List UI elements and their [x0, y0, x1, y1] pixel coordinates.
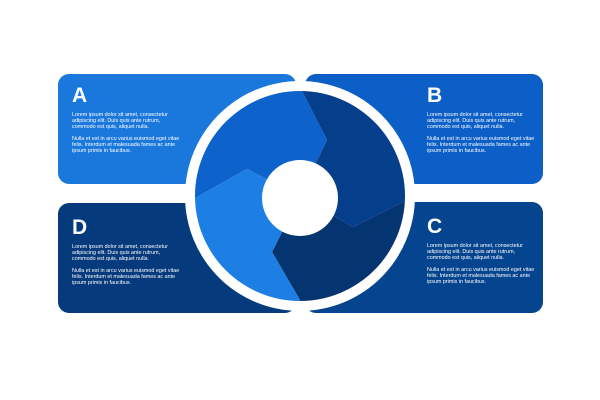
text A: Nulla et est in arcu varius euismod eget vitae felis. Interdum et malesuada fames ac ante ipsum primis in faucibus. [72, 136, 179, 154]
text D: Lorem ipsum dolor sit amet, consectetur adipiscing elit. Duis quis ante rutrum, commodo est quis, aliquet nulla. [72, 244, 168, 262]
circle chart [185, 81, 415, 311]
text A: Lorem ipsum dolor sit amet, consectetur adipiscing elit. Duis quis ante rutrum, commodo est quis, aliquet nulla. [72, 112, 168, 130]
panel D [58, 203, 296, 313]
text B: Lorem ipsum dolor sit amet, consectetur adipiscing elit. Duis quis ante rutrum, commodo est quis, aliquet nulla. [427, 112, 523, 130]
text C: Nulla et est in arcu varius euismod eget vitae felis. Interdum et malesuada fames ac ante ipsum primis in faucibus. [427, 267, 534, 285]
panel B [305, 74, 543, 184]
text D: D [72, 216, 87, 239]
text C: C [427, 215, 442, 238]
text B: B [427, 84, 442, 107]
text D: Nulla et est in arcu varius euismod eget vitae felis. Interdum et malesuada fames ac ante ipsum primis in faucibus. [72, 268, 179, 286]
text B: Nulla et est in arcu varius euismod eget vitae felis. Interdum et malesuada fames ac ante ipsum primis in faucibus. [427, 136, 534, 154]
panel A [58, 74, 296, 184]
text C: Lorem ipsum dolor sit amet, consectetur adipiscing elit. Duis quis ante rutrum, commodo est quis, aliquet nulla. [427, 243, 523, 261]
panel C [305, 202, 543, 313]
text A: A [72, 84, 87, 107]
text B [427, 84, 534, 154]
text A [72, 84, 179, 154]
text D [72, 216, 179, 286]
text C [427, 215, 534, 285]
